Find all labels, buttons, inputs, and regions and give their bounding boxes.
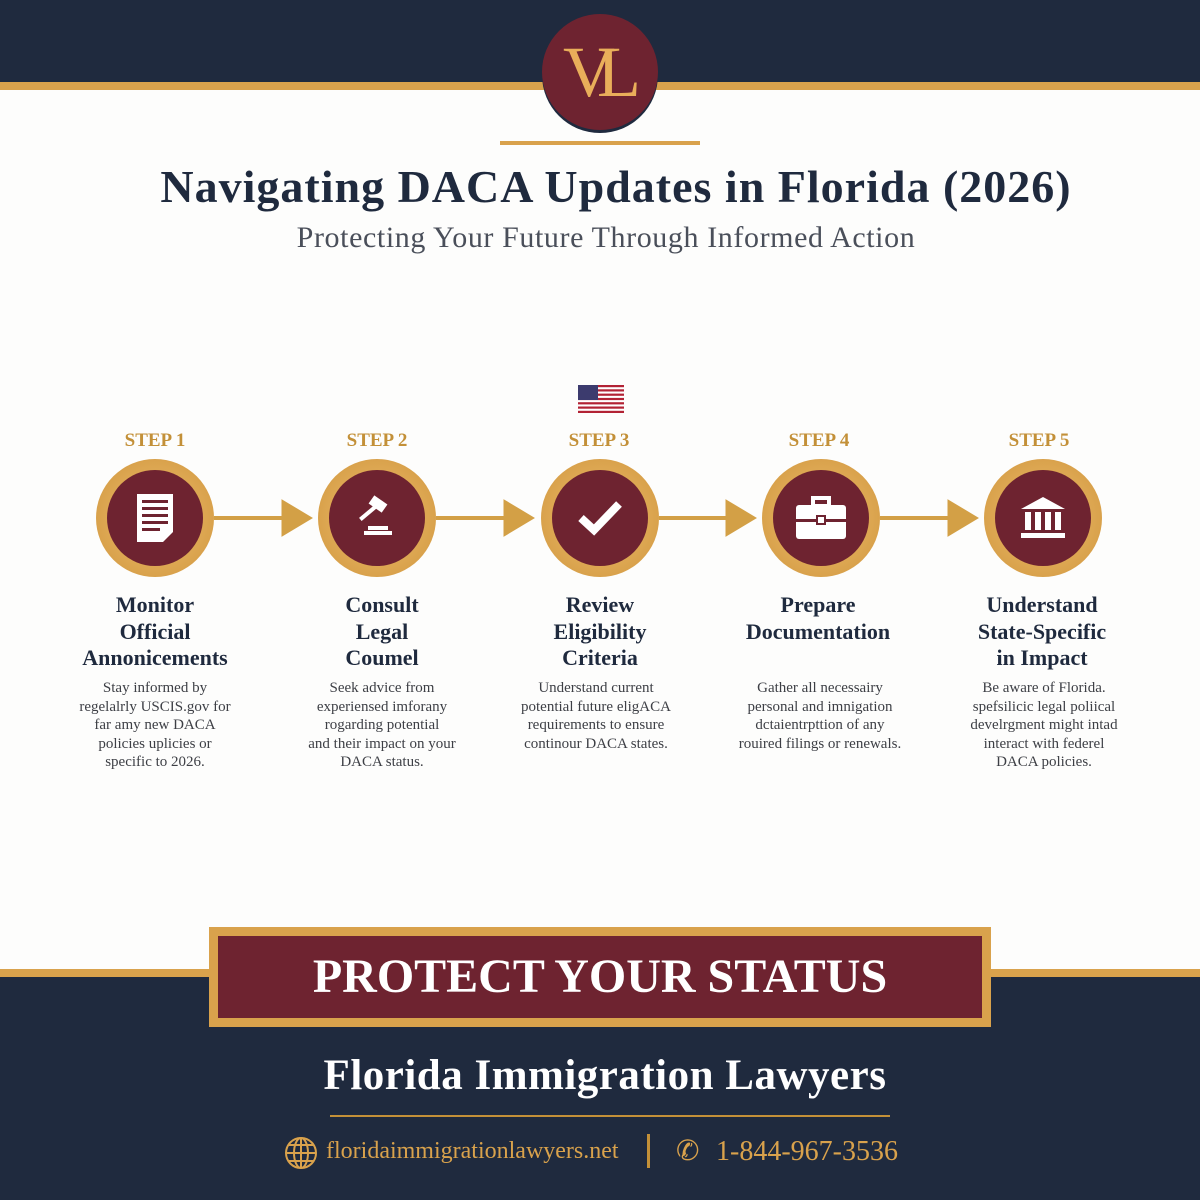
text: Coumel: [345, 645, 419, 670]
logo: [542, 14, 658, 130]
text: spefsilicic legal poliical: [973, 698, 1115, 714]
icon: phone: ✆: [676, 1136, 699, 1167]
text: STEP 1: [125, 430, 185, 451]
text: Consult: [345, 592, 419, 617]
step 4: [739, 430, 901, 752]
text: regelalrly USCIS.gov for: [79, 698, 231, 714]
text: Eligibility: [554, 618, 646, 644]
icon: courthouse: [984, 459, 1102, 577]
banner: protect your status: PROTECT YOUR STATUS: [313, 950, 887, 1003]
contact info: floridaimmigrationlawyers.net: [326, 1138, 619, 1164]
text: State-Specific: [978, 618, 1106, 644]
text: interact with federel: [984, 736, 1104, 752]
text: specific to 2026.: [105, 754, 205, 770]
text: STEP 4: [789, 430, 849, 451]
title: Navigating DACA Updates in Florida (2026): [160, 161, 1072, 212]
text: personal and imnigation: [748, 698, 892, 714]
text: DACA status.: [340, 754, 424, 770]
text: STEP 2: [347, 430, 407, 451]
text: Documentation: [746, 618, 890, 644]
text: Official: [120, 618, 190, 644]
step 2: [308, 430, 456, 770]
contact info: 1-844-967-3536: [716, 1136, 898, 1167]
text: Stay informed by: [103, 680, 207, 696]
text: far amy new DACA: [94, 717, 216, 733]
text: Legal: [356, 618, 408, 644]
icon: checkmark: [541, 459, 659, 577]
text: dctaientrpttion of any: [755, 717, 885, 733]
firm name: Florida Immigration Lawyers: [324, 1052, 886, 1099]
text: Prepare: [781, 592, 855, 617]
step 3: [521, 430, 671, 752]
contact info: [285, 1134, 898, 1169]
text: Be aware of Florida.: [982, 680, 1106, 696]
text: Understand: [986, 592, 1098, 617]
text: continour DACA states.: [524, 736, 668, 752]
icon: gavel: [318, 459, 436, 577]
subtitle: Protecting Your Future Through Informed Action: [297, 221, 915, 254]
text: Understand current: [538, 680, 654, 696]
text: Monitor: [116, 592, 194, 617]
text: develrgment might intad: [970, 717, 1118, 733]
divider under logo: [500, 141, 700, 145]
icon: document: [96, 459, 214, 577]
divider gold: [330, 1115, 890, 1117]
text: Criteria: [562, 645, 638, 670]
text: policies uplicies or: [98, 736, 212, 752]
text: requirements to ensure: [528, 717, 664, 733]
header band: [0, 0, 1200, 90]
text: in Impact: [996, 645, 1088, 670]
text: Annonicements: [82, 645, 228, 670]
text: and their impact on your: [308, 736, 456, 752]
step 5: [970, 430, 1118, 770]
logo: VL: [563, 32, 623, 112]
text: STEP 5: [1009, 430, 1069, 451]
text: rouired filings or renewals.: [739, 736, 901, 752]
text: Gather all necessairy: [757, 680, 883, 696]
footer band: [0, 969, 1200, 1200]
banner: protect your status: [209, 927, 991, 1027]
text: experiensed imforany: [317, 698, 447, 714]
arrows connecting steps: [214, 499, 979, 537]
text: DACA policies.: [996, 754, 1092, 770]
icon: globe: [285, 1137, 317, 1169]
icon: US flag: [578, 385, 624, 413]
text: STEP 3: [569, 430, 629, 451]
icon: briefcase: [762, 459, 880, 577]
text: rogarding potential: [325, 717, 439, 733]
text: Seek advice from: [330, 680, 434, 696]
step 1: [79, 430, 231, 770]
text: potential future eligACA: [521, 698, 671, 714]
text: Review: [566, 592, 634, 617]
